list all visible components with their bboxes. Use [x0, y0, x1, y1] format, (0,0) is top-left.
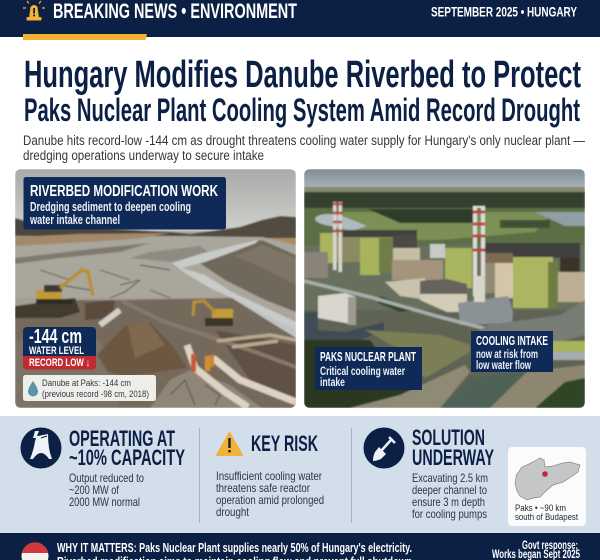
stat: water level: WATER LEVEL [29, 345, 84, 357]
text: capacity detail: Output reduced to [69, 471, 144, 485]
icon: warning triangle [216, 431, 243, 456]
map card: Paks location: south of Budapest [515, 512, 578, 522]
stat: water level: RECORD LOW ↓ [29, 357, 90, 369]
icon: water drop [28, 381, 38, 396]
text: capacity detail [69, 471, 144, 509]
label: Paks nuclear plant: intake [320, 377, 345, 389]
map card: Paks location [508, 447, 586, 526]
label: cooling intake [471, 331, 553, 372]
text: capacity detail: 2000 MW normal [69, 495, 140, 509]
note: previous record: (previous record -98 cm, 2018) [42, 389, 149, 400]
panel: key facts [0, 416, 600, 533]
header headline: BREAKING NEWS • ENVIRONMENT [53, 0, 297, 23]
text: key risk detail: Insufficient cooling water [216, 469, 322, 483]
text: solution detail: deeper channel to [412, 483, 487, 497]
heading: capacity: ~10% CAPACITY [69, 445, 185, 470]
text: key risk detail: threatens safe reactor [216, 481, 310, 495]
label: Paks nuclear plant [315, 347, 422, 390]
photo: dredging on dry riverbed [15, 169, 296, 408]
map card: Paks location: Paks • ~90 km [515, 503, 566, 513]
stat: water level [23, 326, 96, 370]
map marker: Paks [542, 471, 548, 477]
title [24, 54, 581, 128]
label: cooling intake: now at risk from [476, 349, 538, 361]
panel: nuclear plant photo [304, 169, 585, 408]
label: cooling intake: COOLING INTAKE [476, 334, 548, 348]
heading: key risk: KEY RISK [251, 431, 318, 456]
text: solution detail [412, 471, 488, 521]
note: previous record: Danube at Paks: -144 cm [42, 378, 131, 389]
note: previous record [23, 375, 156, 401]
heading: solution [412, 425, 494, 470]
label: Paks nuclear plant: PAKS NUCLEAR PLANT [320, 350, 416, 364]
text: government response [492, 540, 580, 560]
heading: solution: SOLUTION [412, 425, 485, 450]
icon: alert beacon [23, 1, 45, 20]
icon: shovel [364, 428, 404, 468]
heading: capacity: OPERATING AT [69, 426, 175, 451]
label: riverbed modification work [24, 177, 226, 230]
label: riverbed modification work: RIVERBED MODIFICATION WORK [30, 183, 218, 200]
text: solution detail: ensure 3 m depth [412, 495, 485, 509]
text: key risk detail: operation amid prolonged [216, 493, 324, 507]
accent bar [23, 34, 147, 40]
subtitle: dredging operations underway to secure intake [23, 148, 264, 163]
label: riverbed modification work: water intake channel [29, 213, 120, 227]
text: solution detail: Excavating 2.5 km [412, 471, 488, 485]
text: key risk detail [216, 469, 324, 519]
label: cooling intake: low water flow [476, 360, 531, 372]
subtitle [23, 133, 585, 163]
text: why it matters: WHY IT MATTERS: Paks Nuclear Plant supplies nearly 50% of Hungary's electricity. [57, 541, 412, 555]
footer bar [0, 533, 600, 560]
icon: Hungarian flag [22, 542, 48, 560]
label: riverbed modification work: Dredging sediment to deepen cooling [30, 200, 191, 214]
header bar [0, 0, 600, 37]
icon: power plant [20, 428, 62, 468]
text: key risk detail: drought [216, 505, 250, 519]
text: why it matters [57, 541, 412, 560]
heading: solution: UNDERWAY [412, 445, 494, 470]
heading: capacity [69, 426, 185, 470]
text: solution detail: for cooling pumps [412, 507, 487, 521]
map: Hungary outline [515, 458, 580, 500]
photo: Paks plant aerial [304, 169, 585, 408]
panel: riverbed photo [15, 169, 296, 408]
stat: water level: -144 cm [29, 326, 82, 348]
label: Paks nuclear plant: Critical cooling water [320, 366, 405, 378]
text: capacity detail: ~200 MW of [69, 483, 120, 497]
